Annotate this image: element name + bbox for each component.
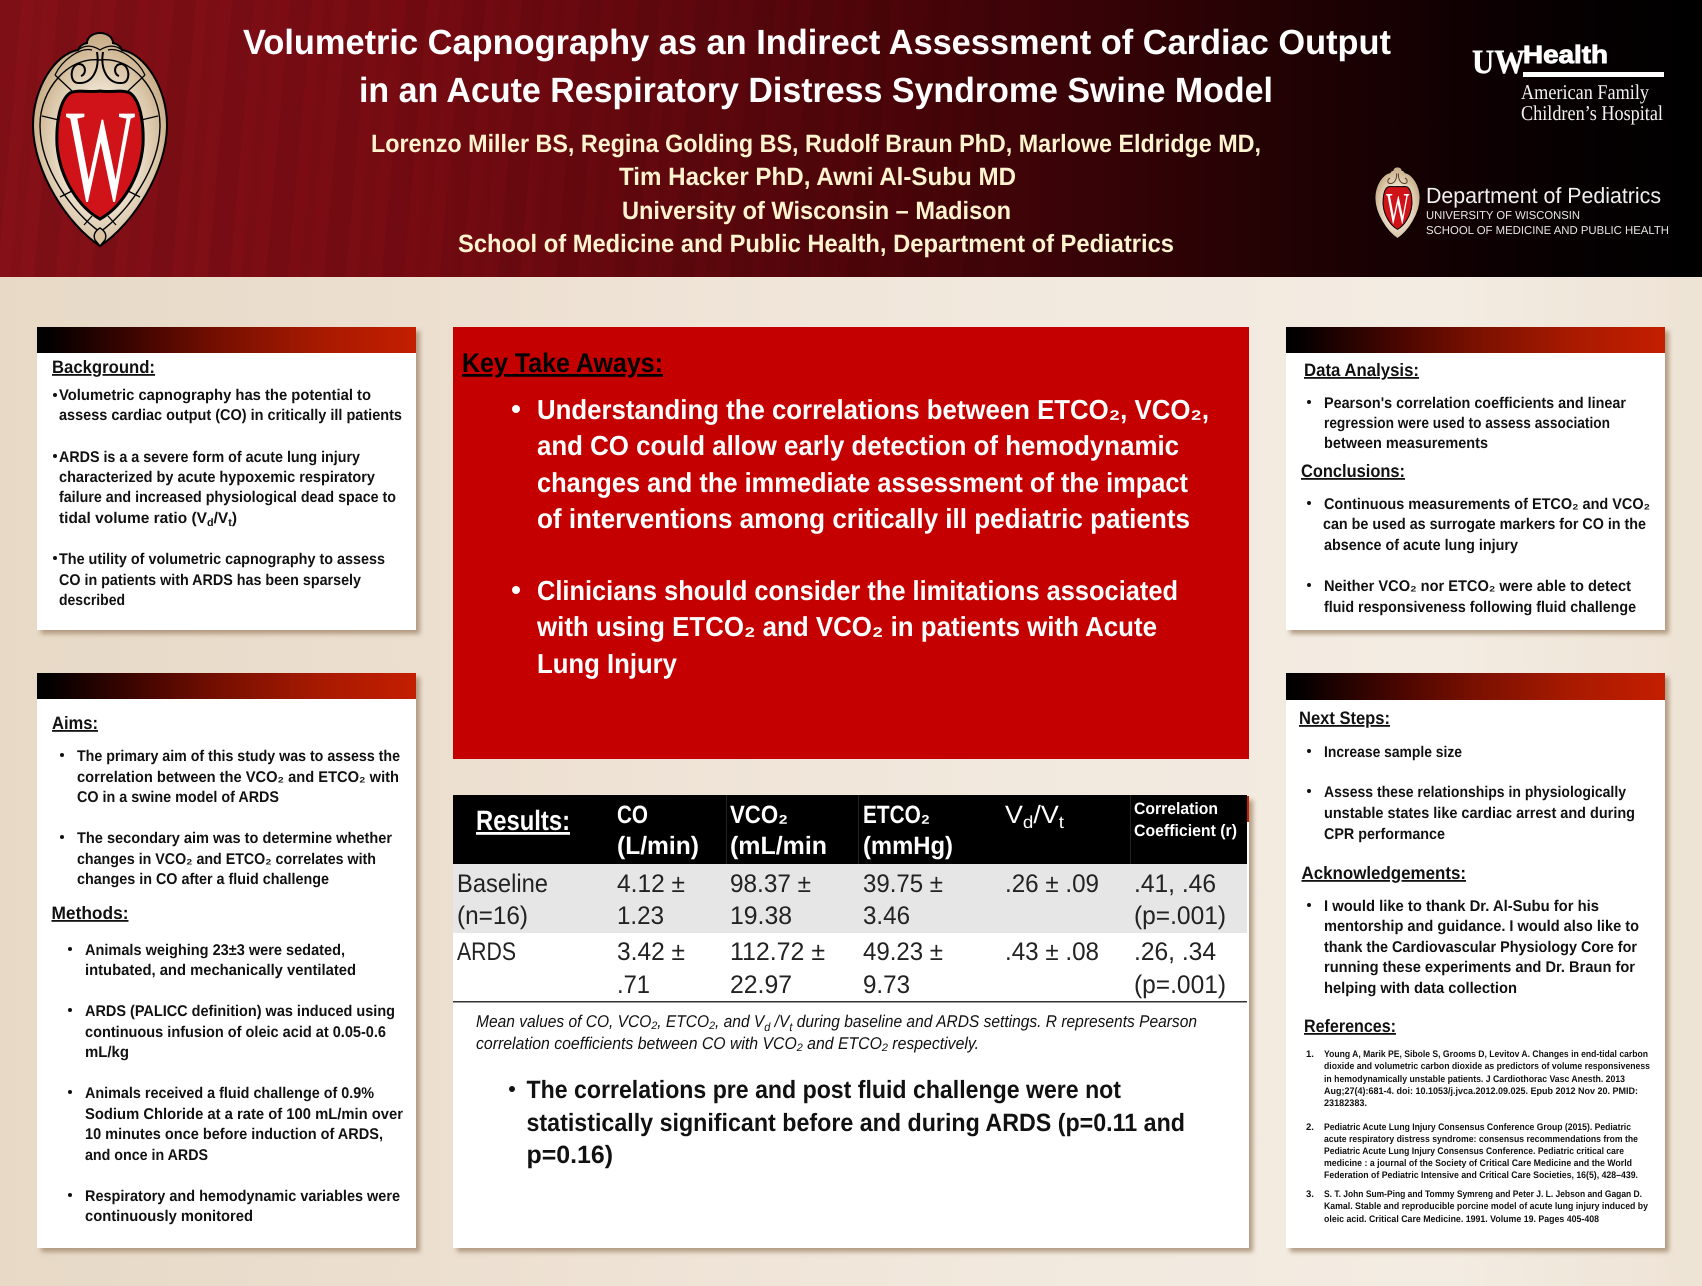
heading: conclusions: Conclusions: xyxy=(1301,461,1405,481)
text: methods bullets: and once in ARDS xyxy=(85,1147,208,1164)
table: results: d xyxy=(1023,812,1033,832)
text: background bullets: Volumetric capnography has the potential to xyxy=(59,387,371,404)
text: key take away 1: and CO could allow early detection of hemodynamic xyxy=(537,430,1179,461)
text: fluid challenge finding: The correlations pre and post fluid challenge were not xyxy=(526,1076,1122,1104)
heading: references: References: xyxy=(1304,1016,1396,1036)
text: next steps bullets xyxy=(1307,744,1635,843)
text: table caption: during baseline and ARDS settings. R represents Pearson xyxy=(792,1012,1197,1031)
table: results: (p=.001) xyxy=(1134,971,1226,999)
logo: Department of Pediatrics: UNIVERSITY OF WISCONSIN xyxy=(1426,210,1580,222)
authors and affiliation: Lorenzo Miller BS, Regina Golding BS, Rudolf Braun PhD, Marlowe Eldridge MD, xyxy=(371,130,1261,158)
text: aims bullets xyxy=(60,748,400,888)
text: methods bullets: mL/kg xyxy=(85,1044,129,1061)
table: results: 3.46 xyxy=(863,902,910,930)
logo: Department of Pediatrics: Department of Pediatrics xyxy=(1426,183,1661,208)
text: acknowledgements bullet: mentorship and guidance. I would also like to xyxy=(1324,918,1639,935)
text: methods bullets: 10 minutes once before induction of ARDS, xyxy=(85,1126,383,1143)
text: conclusions bullets: fluid responsiveness following fluid challenge xyxy=(1324,599,1636,616)
table: results xyxy=(453,795,1247,1002)
panel: background xyxy=(37,327,416,630)
text: background bullets: assess cardiac output (CO) in critically ill patients xyxy=(59,407,402,424)
text: references list: 2. xyxy=(1306,1122,1314,1133)
authors and affiliation: University of Wisconsin – Madison xyxy=(622,197,1011,225)
table: results: V xyxy=(1005,801,1022,829)
text: references list: Pediatric Acute Lung Injury Consensus Conference Group (2015). Pediatric xyxy=(1324,1122,1631,1133)
icon: UW crest: W xyxy=(66,82,135,229)
title: in an Acute Respiratory Distress Syndrome Swine Model xyxy=(359,71,1273,110)
text: references list: dioxide and volumetric carbon dioxide as predictors of volume responsiveness xyxy=(1324,1061,1650,1072)
text: background bullets: ) xyxy=(232,510,237,527)
text: key take away 1: Understanding the correlations between ETCO₂, VCO₂, xyxy=(537,394,1209,425)
text: background bullets: The utility of volumetric capnography to assess xyxy=(59,551,385,568)
table: results: 39.75 ± xyxy=(863,870,943,898)
text: next steps bullets: Assess these relationships in physiologically xyxy=(1324,784,1626,801)
table: results: 3.42 ± xyxy=(617,938,685,966)
logo: UW Health American Family Children's Hospital: UW xyxy=(1472,44,1525,81)
table: results: 49.23 ± xyxy=(863,938,943,966)
text: methods bullets: ARDS (PALICC definition) was induced using xyxy=(85,1003,395,1020)
text: aims bullets: changes in CO after a fluid challenge xyxy=(77,871,329,888)
panel: results xyxy=(453,795,1249,1248)
text: aims bullets: CO in a swine model of ARDS xyxy=(77,789,279,806)
text: background bullets: characterized by acute hypoxemic respiratory xyxy=(59,469,375,486)
text: fluid challenge finding: statistically significant before and during ARDS (p=0.11 and xyxy=(526,1109,1185,1137)
table: results: .26 ± .09 xyxy=(1005,870,1099,898)
text: acknowledgements bullet: helping with data collection xyxy=(1324,980,1517,997)
table: results: .71 xyxy=(617,971,650,999)
text: methods bullets: Respiratory and hemodynamic variables were xyxy=(85,1188,400,1205)
text: next steps bullets: Increase sample size xyxy=(1324,744,1462,761)
text: references list: Federation of Pediatric Intensive and Critical Care Societies, 16(5), 428–439. xyxy=(1324,1170,1638,1181)
title xyxy=(243,23,1391,110)
text: references list: Aug;27(4):681-4. doi: 10.1053/j.jvca.2012.09.025. Epub 2012 Nov 20. PMID: xyxy=(1324,1086,1638,1097)
table: results: (n=16) xyxy=(457,902,528,930)
text: table caption: /V xyxy=(770,1012,791,1031)
text: references list: Pediatric Acute Lung Injury Consensus Conference. Pediatric critical care xyxy=(1324,1146,1624,1157)
text: methods bullets: Animals received a fluid challenge of 0.9% xyxy=(85,1085,374,1102)
table: results: Results: xyxy=(476,805,570,836)
text: references list: 3. xyxy=(1306,1189,1314,1200)
text: conclusions bullets: Neither VCO₂ nor ETCO₂ were able to detect xyxy=(1324,578,1631,595)
text: methods bullets: Animals weighing 23±3 were sedated, xyxy=(85,942,345,959)
table: results: 19.38 xyxy=(730,902,792,930)
text: acknowledgements bullet xyxy=(1307,898,1639,997)
table: results: 4.12 ± xyxy=(617,870,685,898)
text: references list: medicine : a journal of the Society of Critical Care Medicine and the World xyxy=(1324,1158,1632,1169)
table: results: Baseline xyxy=(457,870,548,898)
logo: Department of Pediatrics: SCHOOL OF MEDICINE AND PUBLIC HEALTH xyxy=(1426,225,1669,237)
title: Volumetric Capnography as an Indirect Assessment of Cardiac Output xyxy=(243,23,1391,62)
text: key take away 1 xyxy=(512,394,1209,534)
logo: Department of Pediatrics xyxy=(1375,167,1669,238)
table: results: (mmHg) xyxy=(863,832,953,860)
heading: key take aways: Key Take Aways: xyxy=(462,348,663,378)
text: key take away 2: with using ETCO₂ and VCO₂ in patients with Acute xyxy=(536,611,1157,642)
text: methods bullets: intubated, and mechanically ventilated xyxy=(85,962,356,979)
table: results: (p=.001) xyxy=(1134,902,1226,930)
authors and affiliation: Tim Hacker PhD, Awni Al-Subu MD xyxy=(619,163,1016,191)
text: table caption: Mean values of CO, VCO₂, ETCO₂, and V xyxy=(476,1012,791,1031)
table: results: /V xyxy=(1033,801,1059,829)
logo: Department of Pediatrics: W xyxy=(1386,183,1409,233)
heading: data analysis: Data Analysis: xyxy=(1304,360,1419,380)
text: background bullets: /V xyxy=(214,510,229,527)
heading: methods: Methods: xyxy=(52,903,128,923)
text: background bullets: failure and increased physiological dead space to xyxy=(59,489,396,506)
text: key take away 1: of interventions among critically ill pediatric patients xyxy=(537,503,1190,534)
authors and affiliation: School of Medicine and Public Health, Department of Pediatrics xyxy=(458,230,1174,258)
table: results: .43 ± .08 xyxy=(1005,938,1099,966)
table: results: VCO₂ xyxy=(730,801,788,829)
table: results: 1.23 xyxy=(617,902,664,930)
table: results: .41, .46 xyxy=(1134,870,1216,898)
text: next steps bullets: CPR performance xyxy=(1324,826,1445,843)
text: aims bullets: The secondary aim was to determine whether xyxy=(77,830,392,847)
text: table caption: correlation coefficients between CO with VCO₂ and ETCO₂ respectively. xyxy=(476,1034,979,1053)
text: references list: acute respiratory distress syndrome: consensus recommendations from the xyxy=(1324,1134,1638,1145)
text: key take away 2: Clinicians should consider the limitations associated xyxy=(537,575,1178,606)
text: methods bullets: continuous infusion of oleic acid at 0.05-0.6 xyxy=(85,1024,386,1041)
text: references list: oleic acid. Critical Care Medicine. 1991. Volume 19. Pages 405-408 xyxy=(1324,1214,1599,1225)
text: references list: Kamal. Stable and reproducible porcine model of acute lung injury induced by xyxy=(1324,1201,1649,1212)
text: data analysis bullet: between measurements xyxy=(1324,435,1488,452)
text: data analysis bullet xyxy=(1307,395,1626,452)
table: results: Coefficient (r) xyxy=(1134,822,1237,840)
text: data analysis bullet: regression were used to assess association xyxy=(1324,415,1610,432)
icon: UW crest xyxy=(33,33,167,246)
heading: background: Background: xyxy=(52,357,155,377)
text: data analysis bullet: Pearson's correlation coefficients and linear xyxy=(1324,395,1626,412)
heading: next steps: Next Steps: xyxy=(1299,708,1390,728)
table: results: 98.37 ± xyxy=(730,870,811,898)
text: fluid challenge finding: p=0.16) xyxy=(526,1141,613,1169)
text: key take away 1: changes and the immediate assessment of the impact xyxy=(537,467,1188,498)
text: table caption xyxy=(476,1012,1197,1053)
heading: aims: Aims: xyxy=(52,713,98,733)
text: table caption: d xyxy=(764,1020,771,1034)
table: results: (L/min) xyxy=(617,832,699,860)
text: background bullets: described xyxy=(59,592,125,609)
panel: key take aways xyxy=(453,327,1249,759)
table: results: ETCO₂ xyxy=(863,801,930,829)
text: table caption: t xyxy=(789,1020,793,1034)
text: references list: 1. xyxy=(1306,1049,1314,1060)
table: results: .26, .34 xyxy=(1134,938,1216,966)
text: references list xyxy=(1306,1049,1650,1225)
text: acknowledgements bullet: running these experiments and Dr. Braun for xyxy=(1324,959,1635,976)
text: references list: 23182383. xyxy=(1324,1098,1367,1109)
text: next steps bullets: unstable states like cardiac arrest and during xyxy=(1324,805,1635,822)
panel: next steps, acknowledgements and references xyxy=(1286,673,1665,1248)
text: references list: in hemodynamically unstable patients. J Cardiothorac Vasc Anesth. 2013 xyxy=(1324,1074,1625,1085)
text: background bullets: CO in patients with ARDS has been sparsely xyxy=(59,572,361,589)
table: results: 9.73 xyxy=(863,971,910,999)
text: references list: Young A, Marik PE, Sibole S, Grooms D, Levitov A. Changes in end-tidal carbon xyxy=(1324,1049,1648,1060)
text: conclusions bullets: can be used as surrogate markers for CO in the xyxy=(1323,516,1646,533)
text: aims bullets: correlation between the VCO₂ and ETCO₂ with xyxy=(77,769,399,786)
table: results: 22.97 xyxy=(730,971,792,999)
text: background bullets: d xyxy=(207,517,214,529)
table: results: Correlation xyxy=(1134,800,1218,818)
text: methods bullets: continuously monitored xyxy=(85,1208,253,1225)
text: conclusions bullets: Continuous measurements of ETCO₂ and VCO₂ xyxy=(1324,496,1650,513)
text: conclusions bullets: absence of acute lung injury xyxy=(1324,537,1518,554)
table: results: (mL/min xyxy=(730,832,827,860)
table: results: 112.72 ± xyxy=(730,938,825,966)
header banner xyxy=(0,0,1702,277)
text: references list: S. T. John Sum-Ping and Tommy Symreng and Peter J. L. Jebson and Gagan D. xyxy=(1324,1189,1642,1200)
logo: UW Health American Family Children's Hospital: American Family xyxy=(1521,80,1649,104)
table: results: ARDS xyxy=(457,938,516,966)
table: results: CO xyxy=(617,801,648,829)
panel: data analysis and conclusions xyxy=(1286,327,1665,630)
text: methods bullets: Sodium Chloride at a rate of 100 mL/min over xyxy=(85,1106,403,1123)
text: fluid challenge finding xyxy=(509,1076,1185,1169)
text: conclusions bullets xyxy=(1307,496,1650,616)
text: acknowledgements bullet: I would like to thank Dr. Al-Subu for his xyxy=(1324,898,1599,915)
text: aims bullets: The primary aim of this study was to assess the xyxy=(77,748,400,765)
text: background bullets: ARDS is a a severe form of acute lung injury xyxy=(59,449,360,466)
logo: UW Health American Family Children's Hospital xyxy=(1472,41,1664,125)
text: background bullets xyxy=(53,387,402,609)
text: key take away 2: Lung Injury xyxy=(537,648,678,679)
text: methods bullets xyxy=(68,942,403,1225)
logo: UW Health American Family Children's Hospital: Health xyxy=(1523,41,1608,69)
heading: acknowledgements: Acknowledgements: xyxy=(1302,863,1466,883)
logo: UW Health American Family Children's Hospital: Children’s Hospital xyxy=(1521,101,1663,125)
text: aims bullets: changes in VCO₂ and ETCO₂ correlates with xyxy=(77,851,376,868)
table: results: t xyxy=(1059,812,1064,832)
text: key take away 2 xyxy=(512,575,1178,679)
panel: aims and methods xyxy=(37,673,416,1248)
text: background bullets: tidal volume ratio (V xyxy=(59,510,207,527)
text: background bullets: t xyxy=(228,517,232,529)
text: acknowledgements bullet: thank the Cardiovascular Physiology Core for xyxy=(1324,939,1637,956)
authors and affiliation xyxy=(371,130,1261,258)
